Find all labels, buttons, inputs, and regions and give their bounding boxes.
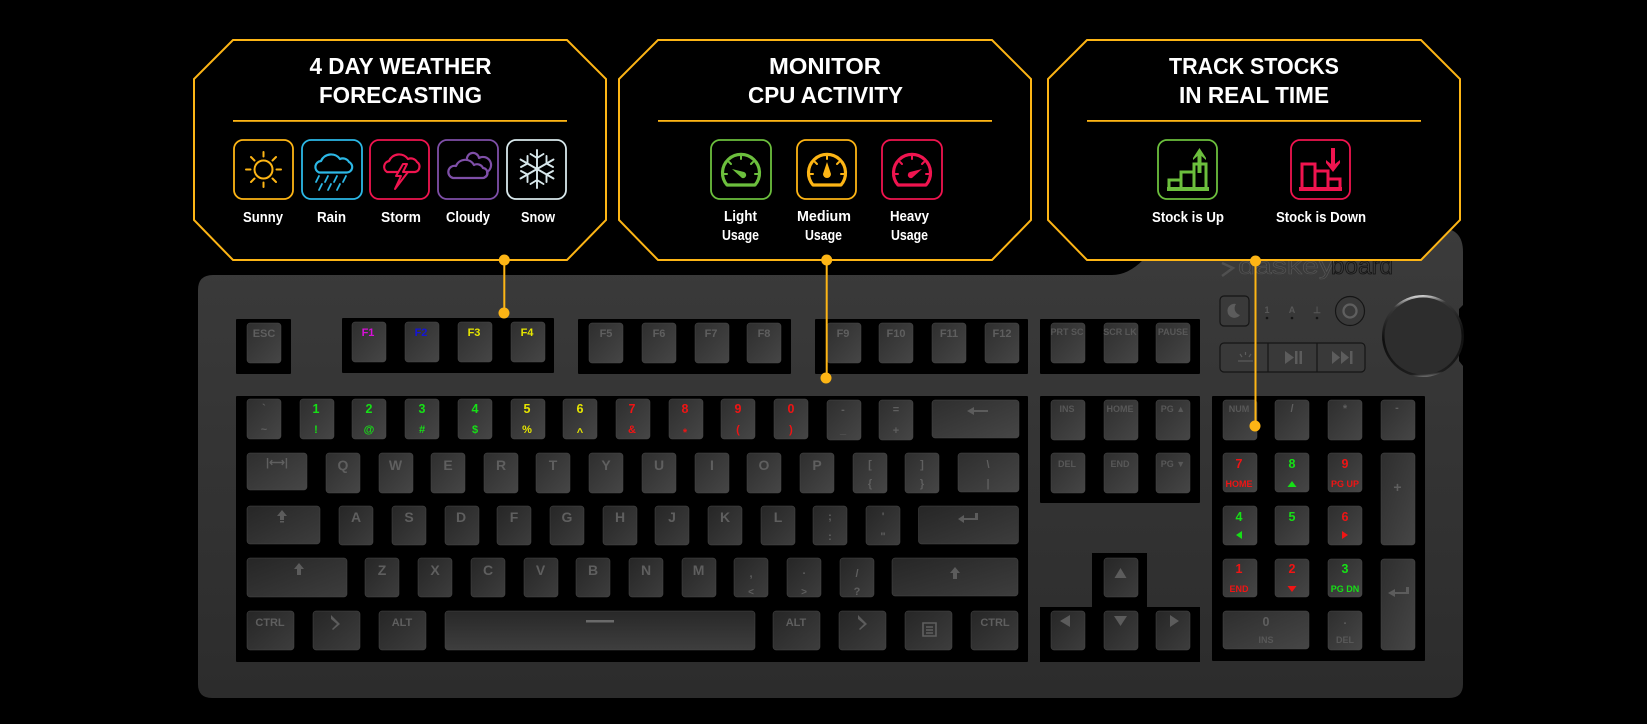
numeric keypad keys: . bbox=[1343, 615, 1347, 627]
number key row: % bbox=[522, 424, 532, 436]
number key row: ! bbox=[314, 424, 318, 436]
label: snow: Snow bbox=[521, 210, 556, 226]
number key row: + bbox=[893, 425, 899, 437]
icon: cloudy bbox=[438, 140, 498, 199]
shift key row: B bbox=[588, 562, 598, 578]
number key row: & bbox=[628, 424, 636, 436]
status lights bbox=[1264, 305, 1321, 319]
key wells bbox=[236, 318, 1425, 662]
number key row: # bbox=[419, 424, 425, 436]
status lights: A bbox=[1289, 305, 1296, 315]
home key row: J bbox=[668, 509, 676, 525]
keyboard body bbox=[198, 228, 1463, 698]
logo: daskeyboard: daskey bbox=[1238, 253, 1334, 280]
navigation cluster keys: INS bbox=[1059, 404, 1075, 414]
heading: FORECASTING bbox=[319, 82, 482, 108]
home key row: S bbox=[404, 509, 414, 525]
home key row: L bbox=[774, 509, 783, 525]
numeric keypad keys: 4 bbox=[1236, 510, 1243, 524]
QWERTY key row: \ bbox=[986, 459, 990, 471]
QWERTY key row: { bbox=[868, 478, 873, 490]
function key row: F6 bbox=[653, 328, 665, 340]
label: light usage bbox=[722, 209, 759, 244]
home key row: ; bbox=[828, 511, 832, 523]
function key row: F9 bbox=[837, 328, 849, 340]
numeric keypad keys: DEL bbox=[1336, 635, 1355, 645]
connector: stocks to numeric keypad bbox=[1250, 256, 1261, 432]
status lights: 1 bbox=[1264, 305, 1270, 315]
label: heavy usage: Heavy bbox=[890, 209, 929, 225]
numeric keypad keys: - bbox=[1395, 402, 1399, 414]
number key row: 2 bbox=[366, 402, 373, 416]
panel: CPU activity bbox=[619, 40, 1031, 260]
icon: sunny bbox=[234, 140, 293, 199]
numeric keypad keys: 8 bbox=[1289, 457, 1296, 471]
number key row: - bbox=[841, 404, 845, 416]
shift key row: X bbox=[430, 562, 440, 578]
numeric keypad keys: HOME bbox=[1226, 479, 1252, 489]
QWERTY key row: Y bbox=[601, 457, 611, 473]
numeric keypad keys: 1 bbox=[1236, 562, 1243, 576]
label: stock is up: Stock is Up bbox=[1152, 210, 1224, 226]
numeric keypad keys: 7 bbox=[1236, 457, 1243, 471]
function key row: F4 bbox=[521, 327, 534, 339]
connector: CPU to number keys bbox=[820, 254, 832, 384]
number key row: 3 bbox=[419, 402, 426, 416]
QWERTY key row: R bbox=[496, 457, 506, 473]
QWERTY key row: | bbox=[986, 478, 990, 490]
function key row: ESC bbox=[253, 328, 275, 340]
number key row: 7 bbox=[629, 402, 636, 416]
media buttons bbox=[1220, 343, 1365, 372]
QWERTY key row: ] bbox=[920, 459, 924, 471]
number key row: * bbox=[683, 427, 688, 439]
function key row: F12 bbox=[993, 328, 1011, 340]
number key row bbox=[247, 399, 1019, 440]
function key row bbox=[247, 322, 1190, 363]
home key row bbox=[247, 506, 1018, 545]
number key row: 4 bbox=[472, 402, 479, 416]
icon: stock up bbox=[1158, 140, 1217, 199]
bottom key row: CTRL bbox=[980, 617, 1010, 629]
icon: snow bbox=[507, 140, 566, 199]
numeric keypad keys: 3 bbox=[1342, 562, 1349, 576]
label: light usage: Light bbox=[724, 209, 757, 225]
icon: heavy usage gauge bbox=[882, 140, 942, 199]
numeric keypad keys: PG UP bbox=[1331, 479, 1359, 489]
bottom key row: ALT bbox=[392, 617, 413, 629]
numeric keypad keys: 5 bbox=[1289, 510, 1296, 524]
function key row: F3 bbox=[468, 327, 480, 339]
label: storm: Storm bbox=[381, 210, 421, 226]
numeric keypad keys: / bbox=[1290, 403, 1294, 415]
heading bbox=[310, 53, 492, 108]
panel outline bbox=[619, 40, 1031, 260]
icon: medium usage gauge bbox=[797, 140, 856, 199]
number key row: 9 bbox=[735, 402, 742, 416]
label: sunny: Sunny bbox=[243, 210, 283, 226]
label: heavy usage: Usage bbox=[891, 228, 928, 244]
shift key row: ? bbox=[854, 586, 861, 598]
panel outline bbox=[1048, 40, 1460, 260]
QWERTY key row: I bbox=[710, 457, 714, 473]
icon: storm bbox=[370, 140, 429, 199]
shift key row: . bbox=[802, 565, 806, 577]
navigation cluster keys: PG ▲ bbox=[1161, 404, 1185, 414]
function key row: F8 bbox=[758, 328, 770, 340]
function key row: F5 bbox=[600, 328, 612, 340]
shift key row: > bbox=[801, 587, 807, 598]
icon: rain bbox=[302, 140, 362, 199]
home key row: : bbox=[828, 531, 832, 543]
home key row: A bbox=[351, 509, 361, 525]
shift key row: V bbox=[536, 562, 546, 578]
QWERTY key row: T bbox=[549, 457, 558, 473]
shift key row: / bbox=[855, 568, 859, 580]
keyboard bbox=[198, 228, 1464, 698]
QWERTY key row: O bbox=[759, 457, 770, 473]
number key row: 5 bbox=[524, 402, 531, 416]
home key row: H bbox=[615, 509, 625, 525]
shift key row: < bbox=[748, 587, 754, 598]
home key row: " bbox=[880, 531, 886, 543]
function key row: F11 bbox=[940, 328, 958, 340]
number key row: ` bbox=[262, 403, 266, 415]
heading: TRACK STOCKS bbox=[1169, 53, 1339, 79]
logo: daskeyboard bbox=[1222, 253, 1393, 280]
function key row: PRT SC bbox=[1050, 327, 1084, 337]
QWERTY key row: W bbox=[389, 457, 403, 473]
shift key row: , bbox=[749, 568, 753, 580]
label: heavy usage bbox=[890, 209, 929, 244]
QWERTY key row bbox=[247, 453, 1019, 493]
QWERTY key row: U bbox=[654, 457, 664, 473]
numeric keypad keys bbox=[1223, 400, 1415, 650]
heading: MONITOR bbox=[769, 53, 881, 79]
navigation cluster keys: HOME bbox=[1106, 404, 1134, 414]
number key row: 6 bbox=[577, 402, 584, 416]
function key row: F1 bbox=[362, 327, 374, 339]
heading bbox=[1169, 53, 1339, 108]
connector: weather to F1-F4 keys bbox=[498, 254, 510, 318]
panel outline bbox=[194, 40, 606, 260]
icon: stock down bbox=[1291, 140, 1350, 199]
bottom key row: CTRL bbox=[255, 617, 285, 629]
home key row: G bbox=[562, 509, 573, 525]
number key row: ^ bbox=[577, 427, 584, 439]
function key row: SCR LK bbox=[1103, 327, 1137, 337]
navigation cluster keys: END bbox=[1110, 459, 1130, 469]
label: medium usage: Medium bbox=[797, 209, 851, 225]
number key row: 0 bbox=[788, 402, 795, 416]
number key row: = bbox=[893, 404, 899, 416]
label: stock is down: Stock is Down bbox=[1276, 210, 1366, 226]
numeric keypad keys: END bbox=[1229, 584, 1249, 594]
navigation cluster keys: PG ▼ bbox=[1161, 459, 1185, 469]
volume knob bbox=[1382, 295, 1464, 377]
control button: moon bbox=[1220, 296, 1249, 326]
shift key row bbox=[247, 558, 1018, 598]
shift key row: N bbox=[641, 562, 651, 578]
numeric keypad keys: 6 bbox=[1342, 510, 1349, 524]
number key row: 1 bbox=[313, 402, 320, 416]
shift key row: C bbox=[483, 562, 493, 578]
QWERTY key row: [ bbox=[868, 459, 872, 471]
heading: CPU ACTIVITY bbox=[748, 82, 903, 108]
bottom key row: ALT bbox=[786, 617, 807, 629]
heading bbox=[748, 53, 903, 108]
QWERTY key row: } bbox=[920, 478, 925, 490]
QWERTY key row: P bbox=[812, 457, 822, 473]
number key row: ~ bbox=[261, 424, 268, 436]
numeric keypad keys: PG DN bbox=[1331, 584, 1359, 594]
number key row: ( bbox=[736, 424, 740, 436]
number key row: $ bbox=[472, 424, 478, 436]
label: medium usage bbox=[797, 209, 851, 244]
navigation cluster keys: DEL bbox=[1058, 459, 1077, 469]
heading: IN REAL TIME bbox=[1179, 82, 1329, 108]
label: rain: Rain bbox=[317, 210, 346, 226]
numeric keypad keys: + bbox=[1393, 479, 1402, 495]
panel: stock tracking bbox=[1048, 40, 1460, 260]
function key row: F2 bbox=[415, 327, 427, 339]
numeric keypad keys: NUM bbox=[1229, 404, 1249, 414]
number key row: _ bbox=[839, 424, 847, 436]
shift key row: Z bbox=[378, 562, 387, 578]
function key row: PAUSE bbox=[1158, 327, 1188, 337]
control button: Q bbox=[1336, 296, 1364, 326]
bottom key row bbox=[247, 611, 1018, 650]
heading: 4 DAY WEATHER bbox=[310, 53, 492, 79]
number key row: 8 bbox=[682, 402, 689, 416]
navigation cluster keys bbox=[1051, 400, 1190, 493]
label: light usage: Usage bbox=[722, 228, 759, 244]
home key row: D bbox=[456, 509, 466, 525]
QWERTY key row: E bbox=[443, 457, 453, 473]
label: medium usage: Usage bbox=[805, 228, 842, 244]
numeric keypad keys: 0 bbox=[1263, 615, 1270, 629]
home key row: ' bbox=[882, 511, 885, 523]
logo: daskeyboard: board bbox=[1331, 253, 1393, 280]
number key row: @ bbox=[364, 424, 375, 436]
function key row: F7 bbox=[705, 328, 717, 340]
numeric keypad keys: 2 bbox=[1289, 562, 1296, 576]
status lights: ⊥ bbox=[1313, 305, 1321, 315]
arrow keys bbox=[1051, 558, 1190, 650]
QWERTY key row: Q bbox=[338, 457, 349, 473]
number key row: ) bbox=[789, 424, 793, 436]
numeric keypad keys: 9 bbox=[1342, 457, 1349, 471]
function key row: F10 bbox=[887, 328, 905, 340]
numeric keypad keys: * bbox=[1343, 403, 1348, 415]
home key row: F bbox=[510, 509, 519, 525]
numeric keypad keys: INS bbox=[1258, 635, 1274, 645]
QWERTY key row: |⟷| bbox=[266, 457, 288, 469]
label: cloudy: Cloudy bbox=[446, 210, 490, 226]
home key row: K bbox=[720, 509, 730, 525]
panel: weather forecasting bbox=[194, 40, 606, 260]
icon: light usage gauge bbox=[711, 140, 771, 199]
shift key row: M bbox=[693, 562, 704, 578]
